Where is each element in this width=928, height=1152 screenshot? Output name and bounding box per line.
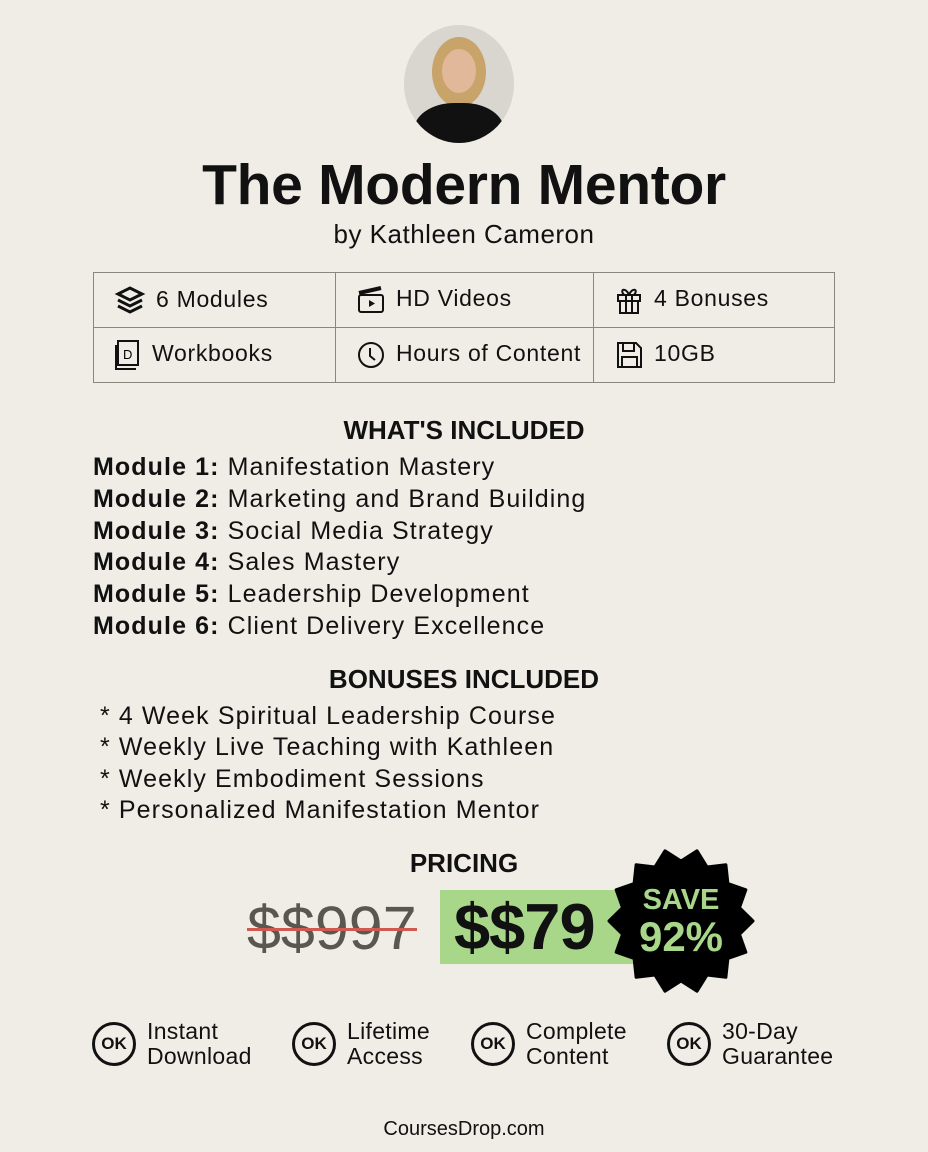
item: guarantee: OK [676, 1034, 702, 1053]
bonus list: * Weekly Embodiment Sessions [100, 765, 485, 793]
item: lifetime access [292, 1018, 430, 1069]
avatar [404, 25, 514, 143]
heading: what's included: WHAT'S INCLUDED [343, 415, 585, 445]
item: guarantee: 30-Day [722, 1018, 798, 1044]
new price box: $$79 [454, 890, 595, 963]
heading: bonuses: BONUSES INCLUDED [329, 664, 599, 694]
new price box [440, 890, 650, 964]
item: instant download: Download [147, 1043, 252, 1069]
module list: Module 3: Social Media Strategy [93, 517, 494, 545]
item: complete content [471, 1018, 627, 1069]
item: complete content: Complete [526, 1018, 627, 1044]
item: complete content: Content [526, 1043, 609, 1069]
features table: Workbooks [152, 340, 273, 366]
features table: 6 Modules [156, 286, 268, 312]
guarantees row [92, 1018, 833, 1069]
features table: D [123, 347, 133, 362]
features table: 4 Bonuses [654, 285, 769, 311]
item: instant download: OK [101, 1034, 127, 1053]
features table [93, 272, 835, 383]
bonus list: * Personalized Manifestation Mentor [100, 796, 540, 824]
module list [93, 453, 586, 640]
bonus list [100, 702, 556, 824]
item: instant download: Instant [147, 1018, 218, 1044]
module list: Module 2: Marketing and Brand Building [93, 485, 586, 513]
module list: Module 5: Leadership Development [93, 580, 530, 608]
save badge: SAVE [643, 884, 719, 916]
module list: Module 6: Client Delivery Excellence [93, 612, 545, 640]
module list: Module 4: Sales Mastery [93, 548, 400, 576]
bonus list: * 4 Week Spiritual Leadership Course [100, 702, 556, 730]
title: The Modern Mentor [202, 153, 726, 217]
item: guarantee [667, 1018, 833, 1069]
features table: HD Videos [396, 285, 512, 311]
module list: Module 1: Manifestation Mastery [93, 453, 495, 481]
heading: pricing: PRICING [410, 848, 518, 878]
item: instant download [92, 1018, 252, 1069]
features table: 10GB [654, 340, 716, 366]
save badge [607, 849, 755, 993]
bonus list: * Weekly Live Teaching with Kathleen [100, 733, 554, 761]
footer: CoursesDrop.com [383, 1118, 545, 1140]
item: lifetime access: Lifetime [347, 1018, 430, 1044]
item: complete content: OK [480, 1034, 506, 1053]
features table: Hours of Content [396, 340, 581, 366]
item: lifetime access: Access [347, 1043, 423, 1069]
item: lifetime access: OK [301, 1034, 327, 1053]
old price: $$997 [247, 894, 417, 962]
item: guarantee: Guarantee [722, 1043, 833, 1069]
subtitle: by Kathleen Cameron [334, 219, 594, 249]
save badge: 92% [639, 913, 723, 960]
